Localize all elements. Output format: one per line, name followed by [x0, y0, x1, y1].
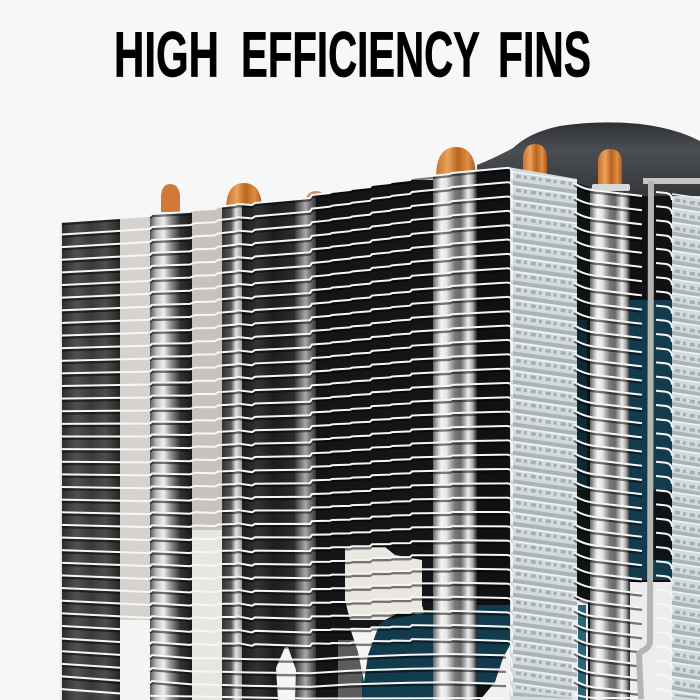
- right radiator fins and fin faces: [513, 172, 700, 699]
- title: HIGH: [114, 19, 219, 91]
- title: EFFICIENCY: [241, 19, 480, 91]
- see-through teal and white fan reflections: [276, 300, 672, 700]
- title: FINS: [498, 19, 591, 91]
- mounting clip wire: [639, 181, 700, 699]
- left radiator fins: [60, 168, 512, 698]
- pipe collar: [592, 184, 630, 191]
- title: [114, 19, 591, 91]
- copper heat pipes: [161, 144, 622, 212]
- cooler body with vertical reflections: [60, 165, 700, 700]
- fan blade behind cooler: [477, 122, 700, 200]
